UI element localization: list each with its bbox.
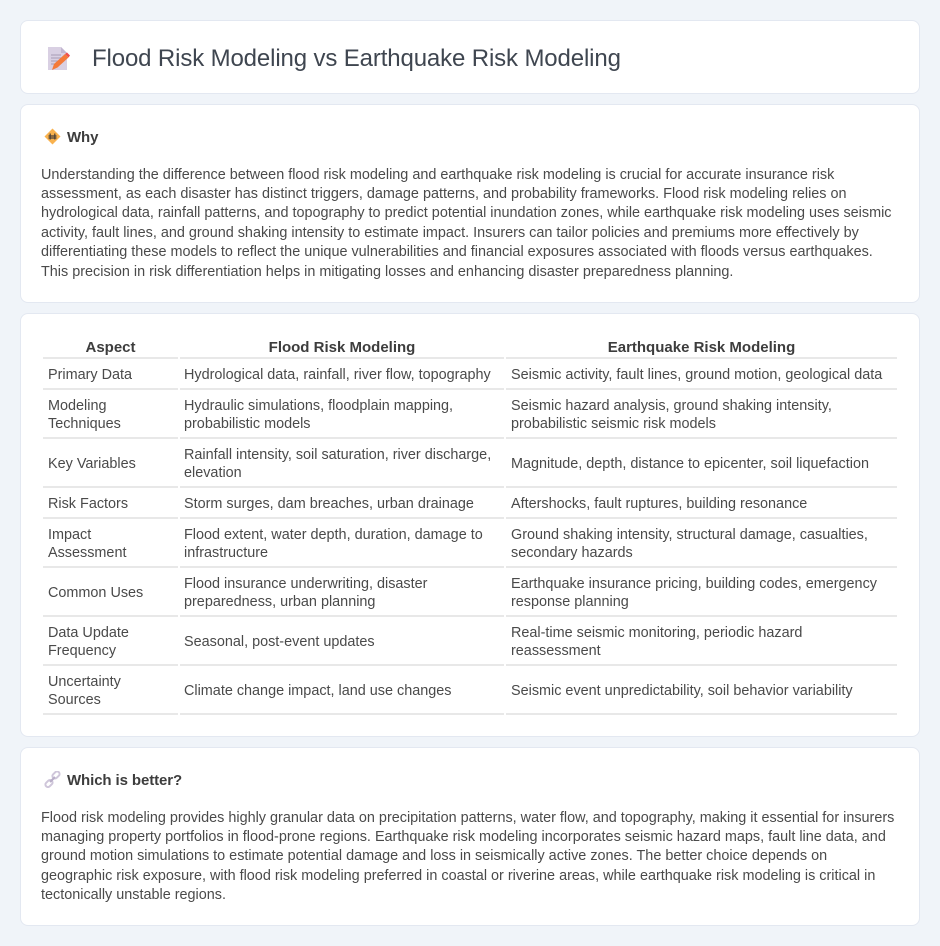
panel: comparison table	[20, 313, 920, 737]
row: data update frequency: Real-time seismic monitoring, periodic hazard	[511, 625, 802, 641]
heading: why: Why	[67, 129, 98, 146]
row: modeling techniques: Modeling	[48, 398, 106, 414]
text block: which is better	[41, 810, 894, 903]
row: modeling techniques: Techniques	[48, 416, 121, 432]
row: data update frequency: Seasonal, post-event updates	[184, 634, 375, 650]
row: data update frequency: Data Update	[48, 625, 129, 641]
row: data update frequency	[48, 625, 802, 659]
icon: warning diamond	[44, 128, 60, 144]
row: common uses: preparedness, urban planning	[184, 594, 375, 610]
row: common uses: Earthquake insurance pricing, building codes, emergency	[511, 576, 877, 592]
text block: why: differentiating these models to reflect the unique vulnerabilities and financial exposures associated with floods versus earthquakes.	[41, 244, 873, 260]
row: key variables	[48, 447, 869, 481]
row: key variables: Key Variables	[48, 456, 136, 472]
table header: Flood Risk Modeling	[269, 339, 415, 356]
row: risk factors	[48, 496, 807, 512]
row: risk factors: Risk Factors	[48, 496, 128, 512]
row: impact assessment: infrastructure	[184, 545, 268, 561]
row: risk factors: Storm surges, dam breaches, urban drainage	[184, 496, 474, 512]
text block: which is better: geographic risk exposure, with flood risk modeling preferred in coastal or riverine areas, while earthquake risk modeling is critical in	[41, 868, 875, 884]
row: impact assessment: Assessment	[48, 545, 126, 561]
title: Flood Risk Modeling vs Earthquake Risk Modeling	[92, 45, 621, 72]
text block: which is better: managing property portfolios in flood-prone regions. Earthquake risk modeling incorporates seismic hazard maps, fault line data, and	[41, 829, 886, 845]
row: modeling techniques: probabilistic seismic risk models	[511, 416, 716, 432]
row: modeling techniques: Hydraulic simulations, floodplain mapping,	[184, 398, 453, 414]
heading: which is better: Which is better?	[67, 772, 182, 789]
row: common uses	[48, 576, 877, 610]
row: impact assessment: Impact	[48, 527, 91, 543]
row: primary data: Seismic activity, fault lines, ground motion, geological data	[511, 367, 882, 383]
icon: memo and pencil	[48, 47, 70, 70]
row: modeling techniques: probabilistic models	[184, 416, 311, 432]
row: data update frequency: reassessment	[511, 643, 601, 659]
row: primary data: Primary Data	[48, 367, 132, 383]
table header: Earthquake Risk Modeling	[608, 339, 795, 356]
row: common uses: Common Uses	[48, 585, 143, 601]
row: uncertainty sources: Uncertainty	[48, 674, 121, 690]
text block: why	[41, 167, 891, 280]
row: impact assessment	[48, 527, 868, 561]
row: modeling techniques	[48, 398, 832, 432]
row: modeling techniques: Seismic hazard analysis, ground shaking intensity,	[511, 398, 832, 414]
row: uncertainty sources: Climate change impact, land use changes	[184, 683, 451, 699]
text block: why: assessment, as each disaster has distinct triggers, damage patterns, and probability frameworks. Flood risk modeling relies on	[41, 186, 847, 202]
panel: title	[20, 20, 920, 94]
row: uncertainty sources: Seismic event unpredictability, soil behavior variability	[511, 683, 853, 699]
row: common uses: Flood insurance underwriting, disaster	[184, 576, 427, 592]
panel: which is better	[20, 747, 920, 926]
text block: why: hydrological data, rainfall patterns, and topography to predict potential inundation zones, while earthquake risk modeling uses seismic	[41, 205, 891, 221]
row: primary data	[48, 367, 882, 383]
row: impact assessment: Flood extent, water depth, duration, damage to	[184, 527, 483, 543]
row: key variables: elevation	[184, 465, 242, 481]
table header	[85, 339, 795, 356]
row: uncertainty sources: Sources	[48, 692, 101, 708]
row: risk factors: Aftershocks, fault ruptures, building resonance	[511, 496, 807, 512]
row: impact assessment: Ground shaking intensity, structural damage, casualties,	[511, 527, 868, 543]
text block: which is better: Flood risk modeling provides highly granular data on precipitation patterns, water flow, and topography, making it essential for insurers	[41, 810, 894, 826]
panel: why	[20, 104, 920, 303]
row: common uses: response planning	[511, 594, 629, 610]
row: key variables: Magnitude, depth, distance to epicenter, soil liquefaction	[511, 456, 869, 472]
row: impact assessment: secondary hazards	[511, 545, 633, 561]
text block: why: activity, fault lines, and ground shaking intensity to estimate impact. Insurers can tailor policies and premiums more effectively by	[41, 225, 859, 241]
table header: Aspect	[85, 339, 136, 356]
text block: why: This precision in risk differentiation helps in mitigating losses and enhancing disaster preparedness planning.	[41, 264, 733, 280]
text block: why: Understanding the difference between flood risk modeling and earthquake risk modeling is crucial for accurate insurance risk	[41, 167, 834, 183]
text block: which is better: tectonically unstable regions.	[41, 887, 226, 903]
text block: which is better: ground motion simulations to estimate potential damage and loss in seismically active zones. The better choice depends on	[41, 848, 827, 864]
row: data update frequency: Frequency	[48, 643, 116, 659]
row: uncertainty sources	[48, 674, 853, 708]
row: primary data: Hydrological data, rainfall, river flow, topography	[184, 367, 491, 383]
icon: link	[44, 771, 60, 788]
row: key variables: Rainfall intensity, soil saturation, river discharge,	[184, 447, 491, 463]
